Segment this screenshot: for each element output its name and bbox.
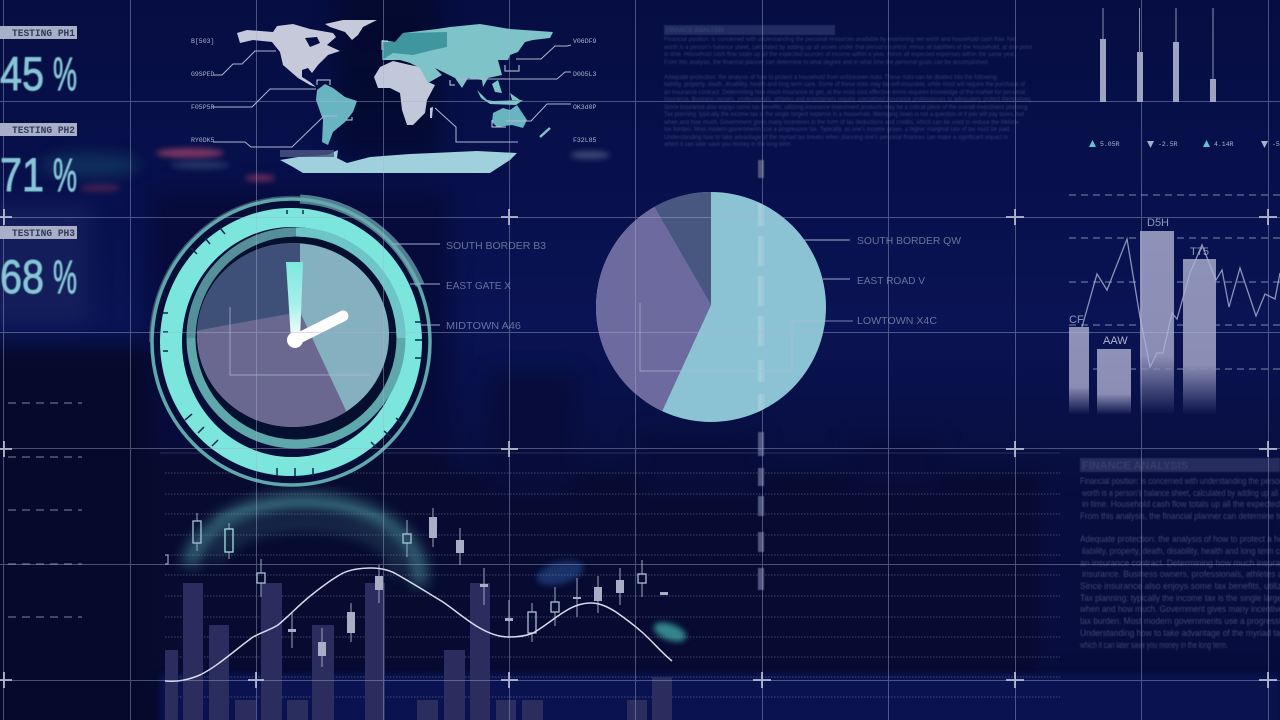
pie chart labels: EAST ROAD V	[857, 275, 925, 287]
text block: financial analysis, top: when and how much. Government gives many incentives in the form of tax deductions and credits, which can be used to reduce the lifetime	[663, 120, 1020, 126]
text block: financial analysis, top: Understanding how to take advantage of the myriad tax breaks when planning one's personal finances can make a significant impact in	[664, 135, 1008, 141]
number: 45%: 45	[0, 47, 44, 100]
number: 71%: %	[53, 148, 77, 201]
number: 45%	[0, 47, 77, 100]
right dashed rules	[1069, 195, 1280, 369]
map: location labels: V06DF9	[573, 38, 597, 45]
stat row with arrows: 5.05R	[1100, 141, 1120, 148]
map: connector lines	[213, 45, 571, 147]
text block: financial analysis, top: in time. Household cash flow totals up all the expected sources of income within a year, minus all expected expenses within the same year.	[664, 52, 1016, 58]
map: location labels: B[503]	[191, 38, 214, 45]
label: testing ph1	[0, 26, 77, 40]
map: greenland	[325, 20, 377, 40]
stat row with arrows: 4.14R	[1214, 141, 1234, 148]
number: 45%: %	[53, 47, 77, 100]
world map	[191, 20, 597, 173]
map: africa	[374, 61, 435, 125]
label: testing ph3	[0, 226, 77, 240]
label: testing ph2	[0, 123, 77, 137]
map: europe highlight	[382, 32, 447, 60]
grid crosshairs	[0, 209, 1277, 688]
text block: financial analysis, top: Financial position: is concerned with understanding the personal resources available by examining net worth and household cash flow. Net	[664, 37, 1016, 43]
number: 71%	[0, 148, 77, 201]
pie chart labels: LOWTOWN X4C	[857, 315, 937, 327]
map: madagascar	[430, 107, 433, 118]
dashed vertical marker	[758, 160, 764, 590]
clock gauge	[150, 197, 430, 485]
line chart: right	[1082, 239, 1280, 367]
text block: financial analysis, top: which it can later save you money in the long term.	[663, 142, 792, 148]
clock: pie face	[197, 243, 389, 427]
text block: financial analysis, top: insurance. Business owners, professionals, athletes and entertainers require specialized insurance professionals to adequately protect themselves.	[664, 97, 1032, 103]
bar chart: right: T75	[1190, 246, 1209, 258]
clock: minute hand	[286, 262, 303, 340]
map: location labels: D0O5L3	[573, 71, 597, 78]
map: southeast asia islands	[477, 80, 523, 105]
bar chart: right	[1069, 217, 1216, 415]
clock: hub	[287, 332, 303, 348]
text block: financial analysis, lower right	[1079, 458, 1280, 651]
bar chart: right: AAW	[1103, 335, 1128, 347]
map: location labels: G9SPED	[191, 71, 215, 78]
map: south america	[316, 84, 357, 145]
number: 68%	[0, 250, 77, 303]
stat row with arrows: -5	[1272, 141, 1280, 148]
pie chart labels: SOUTH BORDER QW	[857, 235, 961, 247]
text block: financial analysis, top: Adequate protection: the analysis of how to protect a household from unforeseen risks. These risks can be divided into the following:	[664, 75, 998, 81]
map: north america	[237, 24, 340, 87]
map: location labels: RY0DK5	[191, 137, 215, 144]
map: location labels: OK3d0P	[573, 104, 597, 111]
stat row with arrows: -2.5R	[1158, 141, 1178, 148]
pie chart labels	[803, 235, 961, 327]
text block: financial analysis, top: FINANCE ANALYSIS	[666, 28, 724, 34]
stat row with arrows	[1089, 140, 1280, 148]
clock: inner ring	[191, 232, 401, 444]
map: eurasia	[382, 24, 553, 88]
text block: financial analysis, top	[663, 25, 1032, 148]
line chart: white curve	[165, 568, 672, 681]
panel: testing phase readouts	[0, 26, 77, 303]
text block: financial analysis, lower right: FINANCE ANALYSIS	[1082, 460, 1188, 472]
clock: main ring	[160, 208, 422, 476]
clock: bracket	[230, 307, 370, 375]
bar chart: lower left	[165, 583, 672, 720]
candlestick chart	[165, 508, 668, 667]
text block: financial analysis, top: Tax planning: typically the income tax is the single largest expense in a household. Managing taxes is not a question of if you will pay taxes, but	[664, 112, 1024, 118]
map: location labels	[191, 38, 597, 144]
map: australia	[492, 105, 527, 128]
map: location labels: F05P5R	[191, 104, 215, 111]
label: testing ph3: TESTING PH3	[12, 229, 75, 240]
clock: hour hand	[295, 316, 343, 340]
dotted chart rules	[160, 453, 1060, 697]
text block: financial analysis, top: an insurance contract. Determining how much insurance to get, at the most cost effective terms requires knowledge of the market for personal	[664, 90, 1025, 96]
clock labels	[392, 240, 546, 332]
bar chart: right: D5H	[1147, 217, 1169, 229]
map: location labels: F32L85	[573, 137, 597, 144]
left dashed scale	[8, 403, 82, 617]
clock: outer thin ring	[152, 199, 430, 485]
map: antarctica	[280, 150, 517, 173]
label: testing ph2: TESTING PH2	[12, 126, 75, 137]
text block: financial analysis, top: tax burden. Most modern governments use a progressive tax. Typically, as one's income grows, a higher marginal rate of tax must be paid.	[664, 127, 1011, 133]
clock: tick marks	[163, 210, 422, 476]
number: 68%: 68	[0, 250, 44, 303]
map: bracket marks	[317, 41, 519, 127]
label: testing ph1: TESTING PH1	[12, 29, 75, 40]
number: 71%: 71	[0, 148, 44, 201]
number: 68%: %	[53, 250, 77, 303]
clock labels: EAST GATE X	[446, 280, 511, 292]
clock labels: MIDTOWN A46	[446, 320, 521, 332]
text block: financial analysis, top: Since insurance also enjoys some tax benefits, utilizing insurance investment products may be a critical piece of the overall investment planning.	[664, 105, 1029, 111]
map: new zealand	[540, 128, 550, 137]
clock labels: SOUTH BORDER B3	[446, 240, 546, 252]
bar chart: right: CF	[1069, 314, 1084, 326]
pie chart	[596, 192, 853, 422]
blurred background glows	[40, 148, 689, 645]
text block: financial analysis, top: worth is a person's balance sheet, calculated by adding up all assets under that person's control, minus all liabilities of the household, at one point	[663, 45, 1032, 51]
text block: financial analysis, top: liability, property, death, disability, health and long term care. Some of these risks may be self-insurable, while most will require the purchase of	[664, 82, 1025, 88]
top-right candle chart	[1100, 8, 1216, 102]
text block: financial analysis, top: From this analysis, the financial planner can determine to what degree and in what time the personal goals can be accomplished.	[664, 60, 989, 66]
